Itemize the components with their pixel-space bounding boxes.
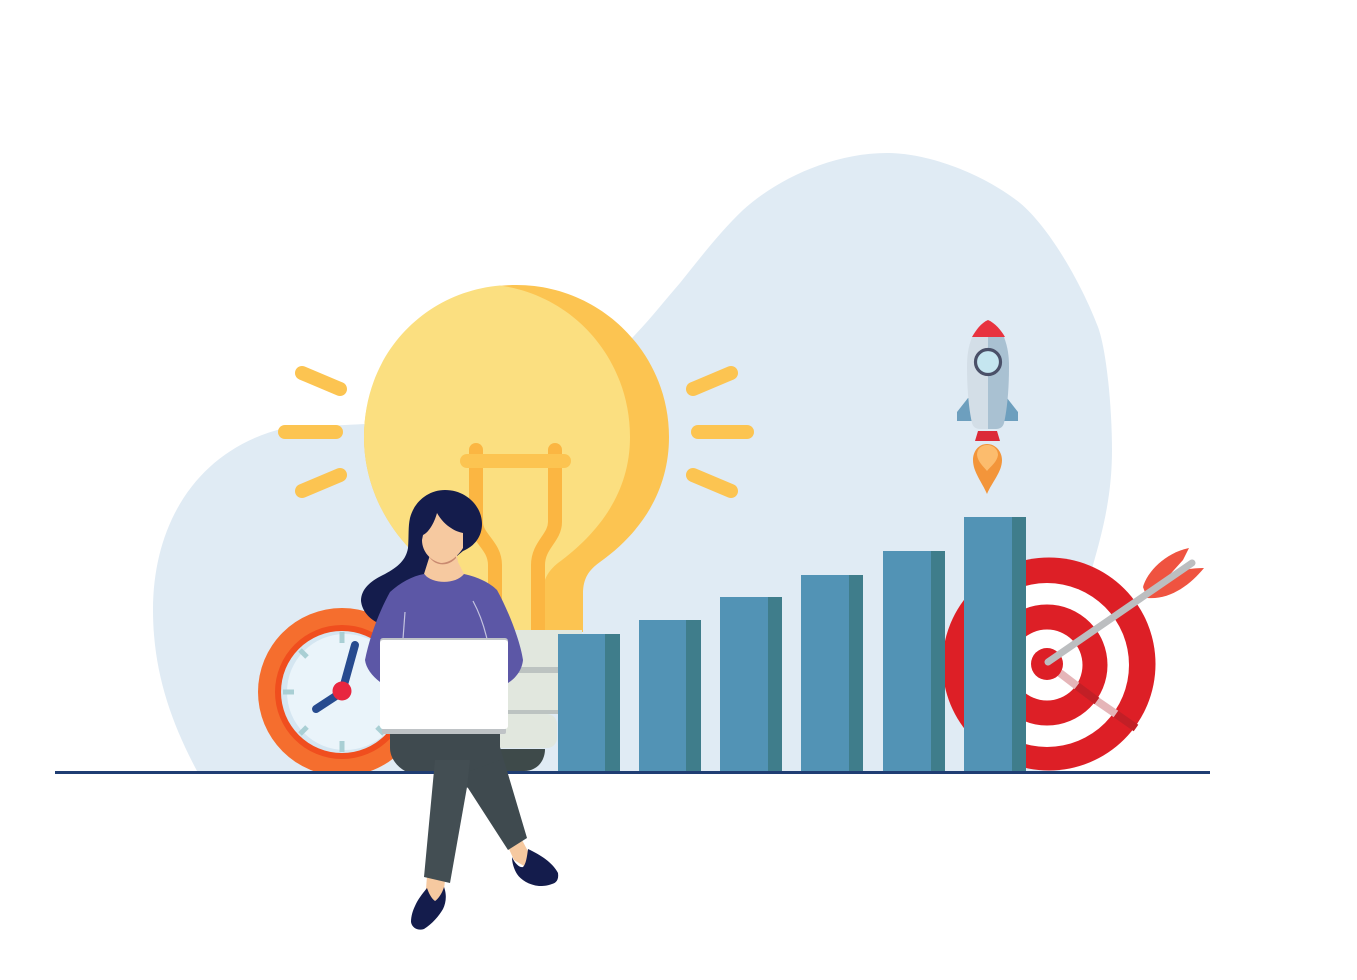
rocket fins	[957, 398, 1018, 421]
illustration	[55, 153, 1210, 930]
hair	[361, 490, 482, 623]
growth bars	[558, 575, 863, 771]
bar 1	[558, 634, 620, 771]
ground line	[55, 771, 1210, 774]
front leg	[424, 760, 470, 883]
left shoe	[411, 887, 446, 930]
light bulb	[364, 285, 669, 771]
laptop	[380, 638, 508, 734]
bar 6	[964, 517, 1026, 771]
bar 5	[883, 551, 945, 771]
arrow	[1048, 548, 1204, 662]
target	[942, 548, 1204, 770]
right shoe	[512, 849, 558, 886]
rocket body	[967, 337, 988, 429]
woman with laptop	[361, 490, 558, 930]
clock	[258, 608, 393, 771]
right foot skin	[509, 840, 530, 866]
bar 2	[639, 620, 701, 771]
rocket body shade	[988, 337, 1009, 429]
sweater	[365, 574, 523, 683]
clock hands	[316, 645, 355, 709]
neck shadow	[430, 553, 456, 564]
bar 4	[801, 575, 863, 771]
hip	[390, 733, 500, 771]
neck	[424, 555, 464, 586]
face	[422, 513, 463, 563]
rocket	[957, 320, 1018, 494]
background blob	[153, 153, 1112, 771]
rocket flame	[973, 444, 1002, 494]
bars in front of target	[883, 517, 1026, 771]
clock centre	[332, 682, 352, 700]
rocket nose	[972, 320, 1005, 337]
sweater folds	[403, 601, 487, 639]
bulb glass	[364, 285, 669, 632]
bulb base	[490, 630, 582, 771]
light rays	[285, 373, 747, 491]
clock ticks	[283, 632, 384, 752]
rocket nozzle	[975, 431, 1000, 441]
filament	[467, 443, 564, 632]
bar 3	[720, 597, 782, 771]
rocket window	[976, 350, 1000, 374]
back leg	[440, 733, 527, 850]
arrow shadow	[1060, 673, 1136, 728]
bulb highlight	[364, 286, 630, 632]
left foot skin	[426, 876, 445, 902]
bullseye	[1031, 648, 1063, 680]
